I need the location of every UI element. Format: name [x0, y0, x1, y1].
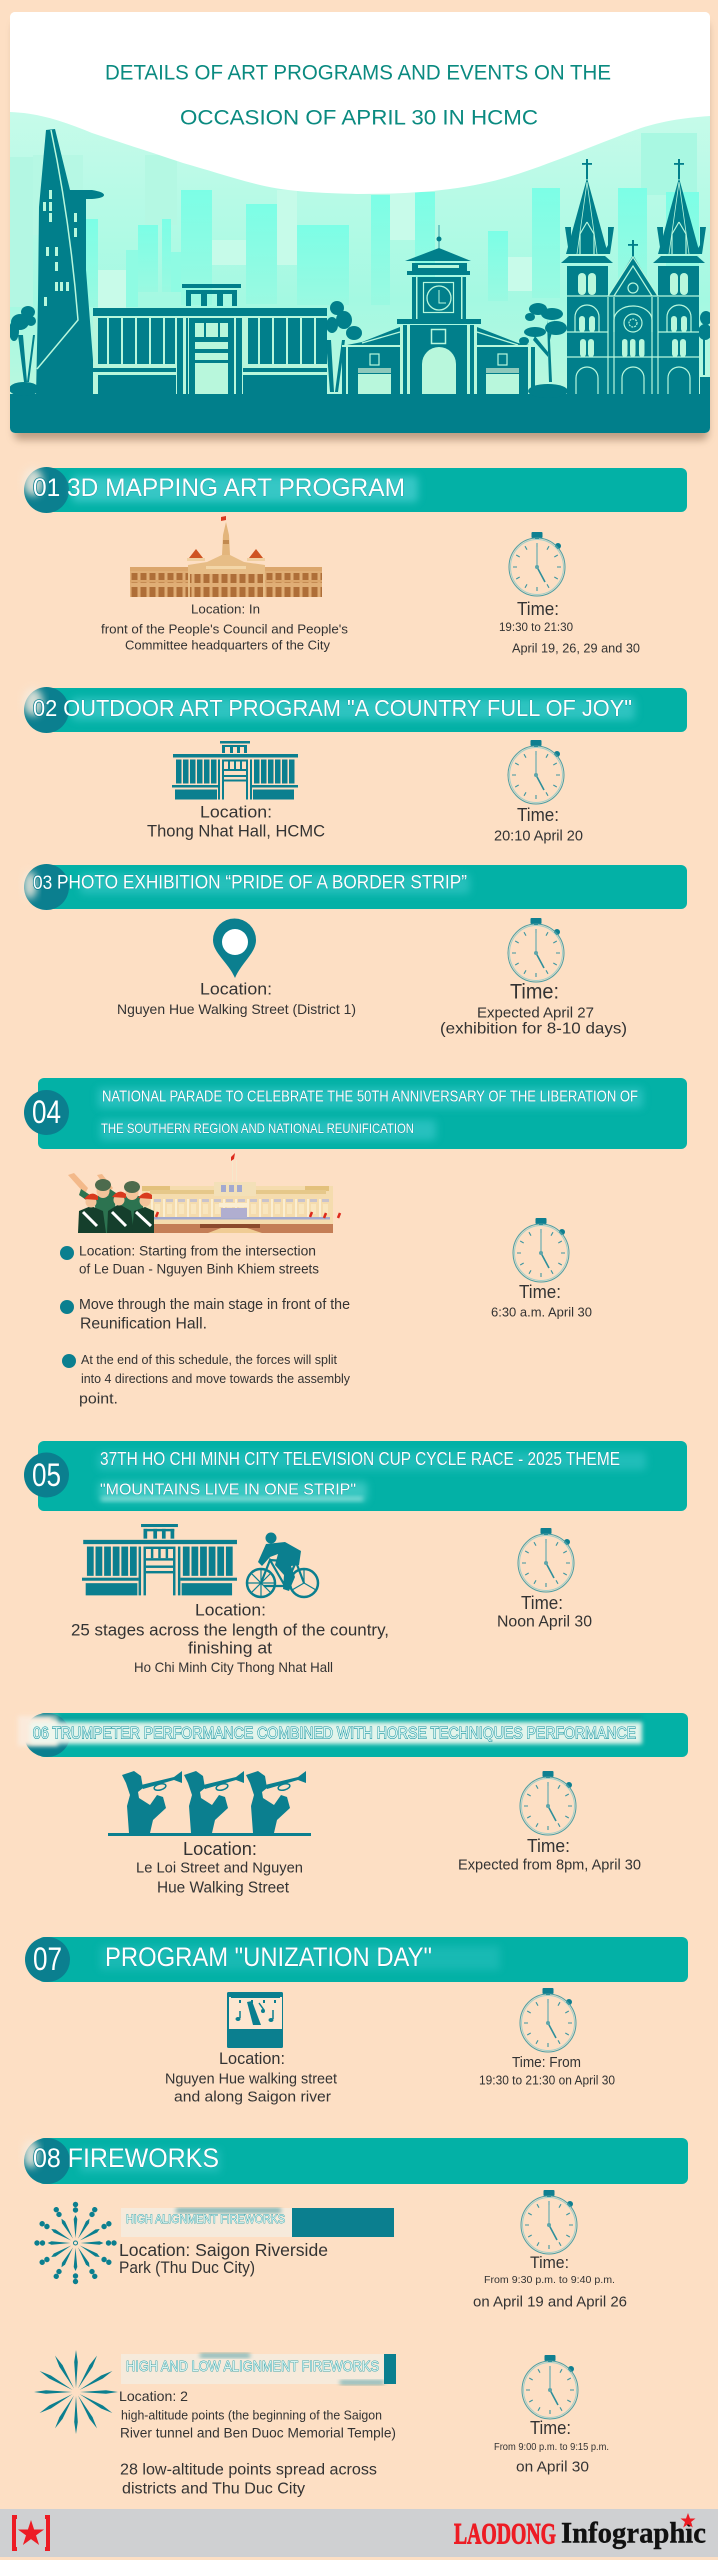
heading 04: THE SOUTHERN REGION AND NATIONAL REUNIFICATION [101, 1120, 414, 1136]
bullet list: At the end of this schedule, the forces will split [81, 1353, 338, 1367]
panel: section 04 [24, 1078, 687, 1408]
title: DETAILS OF ART PROGRAMS AND EVENTS ON THE [105, 62, 611, 84]
Ben Thanh market [342, 225, 535, 394]
location text [119, 2388, 396, 2498]
right tree [519, 303, 712, 398]
icon: red star logo [14, 2517, 48, 2549]
location text: Location: 2 [119, 2388, 188, 2404]
icon: stage with music notes [227, 1992, 283, 2048]
location text [117, 980, 356, 1017]
location text: and along Saigon river [174, 2088, 331, 2106]
brand wordmark: Infographic [561, 2516, 706, 2550]
title [105, 62, 611, 130]
ground [10, 394, 710, 433]
heading 07: 07 [33, 1941, 62, 1977]
icon: stopwatch [513, 1218, 569, 1282]
location text: Location: [183, 1839, 257, 1859]
time text: Time: [519, 1282, 561, 1302]
brand wordmark [454, 2513, 706, 2550]
Thong Nhat Hall [93, 284, 327, 394]
Bitexco tower [36, 129, 104, 396]
brand wordmark: LAODONG [454, 2518, 556, 2550]
bullet list: Reunification Hall. [80, 1316, 207, 1332]
time text [458, 1836, 641, 1874]
heading 02 [23, 687, 687, 733]
heading 08 [23, 2138, 688, 2184]
time text: Time: [530, 2418, 571, 2438]
heading 01 [23, 467, 687, 513]
location text: Location: In [191, 602, 260, 616]
heading 03: 03 PHOTO EXHIBITION “PRIDE OF A BORDER STRIP” [33, 872, 467, 894]
icon: stopwatch [508, 918, 564, 982]
heading 04 [24, 1078, 687, 1149]
time text: April 19, 26, 29 and 30 [512, 640, 640, 656]
time text: 19:30 to 21:30 [499, 620, 573, 634]
location text: Committee headquarters of the City [125, 638, 330, 652]
heading 04: 04 [32, 1094, 61, 1130]
time text [479, 2055, 615, 2088]
location text: Thong Nhat Hall, HCMC [147, 822, 325, 840]
bullet list: Location: Starting from the intersection [79, 1244, 316, 1258]
location text [119, 2240, 328, 2277]
bullet list: point. [79, 1390, 118, 1408]
icon: stopwatch [520, 1771, 576, 1835]
time text: (exhibition for 8-10 days) [440, 1020, 627, 1038]
heading 07 [25, 1937, 688, 1982]
location text [71, 1600, 389, 1675]
panel: section 05 [24, 1441, 687, 1675]
banner: high and low alignment fireworks: HIGH AND LOW ALIGNMENT FIREWORKS [126, 2359, 379, 2375]
location text: Ho Chi Minh City Thong Nhat Hall [134, 1659, 333, 1675]
banner: high alignment fireworks: HIGH ALIGNMENT FIREWORKS [126, 2214, 285, 2226]
heading 01: 01 3D MAPPING ART PROGRAM [33, 474, 405, 502]
heading 05: "MOUNTAINS LIVE IN ONE STRIP" [100, 1482, 356, 1498]
location text [165, 2050, 338, 2106]
time text: on April 30 [516, 2458, 589, 2476]
time text: Time: [521, 1593, 563, 1613]
time text [499, 599, 640, 656]
middle tree [326, 301, 362, 392]
heading 02: 02 OUTDOOR ART PROGRAM "A COUNTRY FULL OF JOY" [33, 695, 632, 721]
time text [494, 805, 583, 844]
left tree [10, 306, 36, 394]
heading 07: PROGRAM "UNIZATION DAY" [105, 1942, 432, 1972]
location text: high-altitude points (the beginning of the Saigon [121, 2408, 382, 2422]
location text: Location: [200, 802, 272, 822]
icon: stopwatch [509, 532, 565, 596]
panel: section 03 [23, 864, 687, 1038]
icon: firework burst [34, 2202, 117, 2284]
location text: 28 low-altitude points spread across [120, 2462, 377, 2478]
banner: high and low alignment fireworks [121, 2354, 396, 2384]
location text: districts and Thu Duc City [122, 2480, 305, 2498]
panel: section 06 [18, 1713, 688, 1896]
icon: map pin [213, 918, 256, 978]
icon: People's Committee building [130, 516, 322, 597]
location text: Nguyen Hue walking street [165, 2070, 338, 2088]
icon: stopwatch [522, 2355, 578, 2419]
heading 05: 05 [32, 1457, 61, 1493]
time text: 20:10 April 20 [494, 828, 583, 844]
banner: high alignment fireworks [121, 2208, 394, 2237]
time text: Time: [527, 1836, 570, 1856]
location text: River tunnel and Ben Duoc Memorial Temple) [120, 2426, 396, 2440]
icon: stopwatch [521, 2190, 577, 2254]
location text [136, 1839, 303, 1896]
location text: Location: [195, 1600, 266, 1620]
time text [473, 2254, 627, 2310]
icon: stopwatch [518, 1528, 574, 1592]
heading 06 [18, 1713, 688, 1757]
icon: soldiers and Reunification Hall [68, 1153, 340, 1233]
icon: stopwatch [520, 1988, 576, 2052]
panel: header illustration [9, 12, 712, 440]
icon: trumpeters [108, 1771, 311, 1836]
icon: stopwatch [508, 740, 564, 804]
location text: Nguyen Hue Walking Street (District 1) [117, 1001, 356, 1017]
footer bar [0, 2509, 718, 2557]
panel: section 08 [23, 2138, 688, 2498]
icon: cyclist [247, 1532, 318, 1597]
time text [491, 1282, 592, 1320]
heading 05 [24, 1441, 687, 1511]
title: OCCASION OF APRIL 30 IN HCMC [180, 106, 538, 130]
time text: From 9:30 p.m. to 9:40 p.m. [484, 2274, 615, 2286]
time text: 6:30 a.m. April 30 [491, 1304, 592, 1320]
time text: Expected from 8pm, April 30 [458, 1856, 641, 1874]
time text [440, 980, 627, 1038]
time text: 19:30 to 21:30 on April 30 [479, 2072, 615, 2088]
location text [147, 802, 325, 840]
time text: From 9:00 p.m. to 9:15 p.m. [494, 2441, 609, 2453]
panel: section 07 [25, 1937, 688, 2106]
time text: Time: [517, 599, 559, 619]
panel: section 02 [23, 687, 687, 844]
time text: on April 19 and April 26 [473, 2294, 627, 2310]
time text: Time: [510, 980, 559, 1004]
Notre-Dame cathedral [561, 159, 706, 394]
location text: Park (Thu Duc City) [119, 2259, 255, 2277]
location text: Location: Saigon Riverside [119, 2240, 328, 2260]
panel: section 01 [23, 467, 687, 656]
location text: 25 stages across the length of the country, [71, 1620, 389, 1640]
location text [101, 602, 348, 652]
time text [494, 2418, 609, 2476]
location text: front of the People's Council and People's [101, 622, 348, 636]
heading 03 [23, 864, 687, 910]
white wave [10, 12, 710, 194]
time text: Expected April 27 [477, 1004, 594, 1022]
location text: finishing at [188, 1638, 272, 1658]
bullet list: of Le Duan - Nguyen Binh Khiem streets [79, 1262, 319, 1276]
icon: Thong Nhat Hall [82, 1524, 237, 1595]
time text [497, 1593, 592, 1630]
icon: Thong Nhat Hall [172, 741, 298, 800]
location text: Location: [200, 980, 272, 998]
time text: Time: [530, 2254, 569, 2272]
bullet list: into 4 directions and move towards the assembly [81, 1372, 351, 1386]
location text: Hue Walking Street [157, 1880, 290, 1896]
icon: firework rays [34, 2350, 118, 2434]
heading 05: 37TH HO CHI MINH CITY TELEVISION CUP CYCLE RACE - 2025 THEME [100, 1449, 620, 1469]
time text: Noon April 30 [497, 1614, 592, 1630]
location text: Location: [219, 2050, 285, 2068]
heading 08: 08 FIREWORKS [33, 2143, 219, 2173]
bullet list: Move through the main stage in front of the [79, 1297, 350, 1313]
time text: Time: From [512, 2055, 581, 2071]
location text: Le Loi Street and Nguyen [136, 1860, 303, 1876]
bullet list [60, 1244, 351, 1408]
time text: Time: [517, 805, 559, 825]
